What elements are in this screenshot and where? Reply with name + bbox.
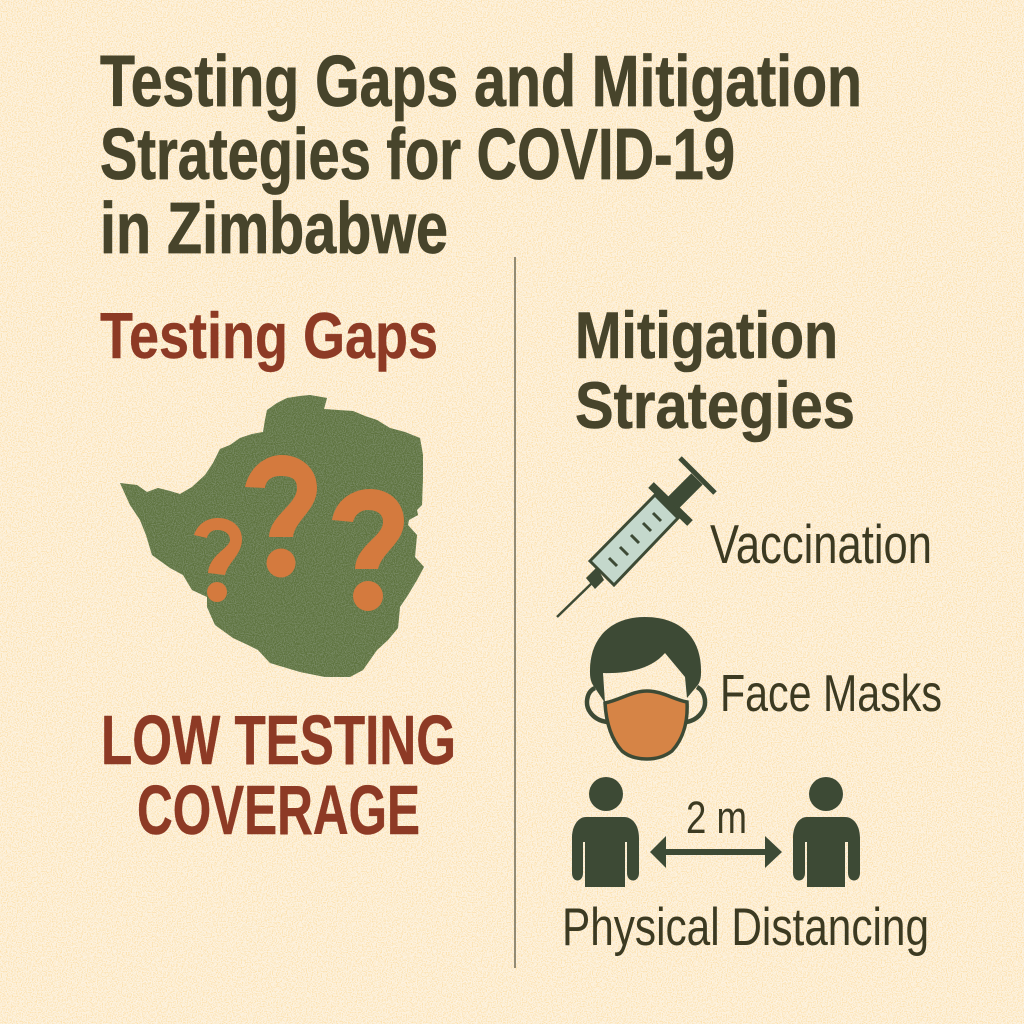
panel: mitigation strategies bbox=[557, 298, 942, 957]
map shape bbox=[120, 395, 424, 677]
title: in Zimbabwe bbox=[100, 189, 448, 269]
icon: question mark left bbox=[194, 518, 242, 602]
heading: mitigation strategies bbox=[575, 298, 855, 442]
label: face masks: Face Masks bbox=[720, 665, 942, 723]
label: physical distancing: Physical Distancing bbox=[562, 898, 929, 957]
title: Strategies for COVID-19 bbox=[100, 115, 735, 195]
icon: question mark middle bbox=[245, 455, 317, 578]
icon: question mark right bbox=[332, 489, 404, 611]
label: vaccination: Vaccination bbox=[710, 513, 932, 575]
title bbox=[100, 42, 862, 269]
icon: person left bbox=[572, 777, 639, 887]
callout: low testing coverage bbox=[101, 701, 456, 849]
icon: person right bbox=[793, 777, 860, 887]
heading: mitigation strategies: Mitigation bbox=[575, 298, 838, 372]
callout: low testing coverage: COVERAGE bbox=[137, 771, 420, 849]
panel: testing gaps bbox=[100, 299, 456, 849]
icon: syringe bbox=[557, 458, 715, 617]
heading: testing gaps: Testing Gaps bbox=[100, 299, 438, 372]
label: 2 m: 2 m bbox=[686, 792, 747, 843]
arrow: two metres bbox=[650, 836, 782, 868]
map of Zimbabwe with question marks bbox=[120, 395, 424, 677]
callout: low testing coverage: LOW TESTING bbox=[101, 701, 456, 779]
heading: mitigation strategies: Strategies bbox=[575, 368, 855, 442]
icon: face mask bbox=[587, 617, 705, 759]
